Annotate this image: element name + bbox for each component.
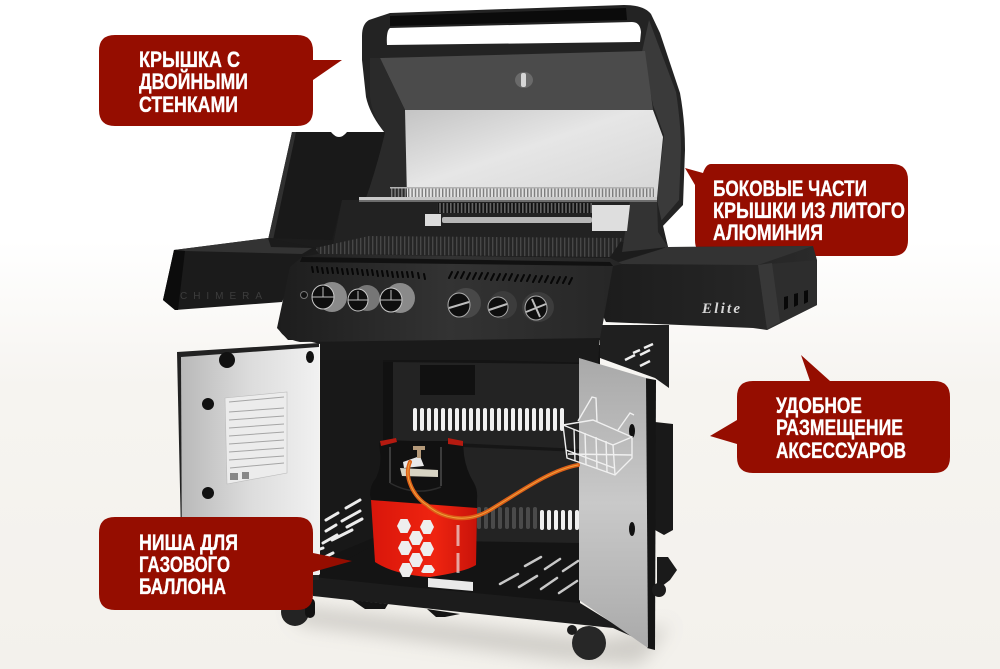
callout: cast aluminium lid sides: КРЫШКИ ИЗ ЛИТОГО [713,198,905,223]
cabinet bottom rail [313,577,640,640]
control knobs [312,282,554,322]
door specification label [225,392,287,484]
top cabinet rail [288,336,600,363]
callout: gas cylinder niche: БАЛЛОНА [139,574,226,599]
callout: gas cylinder niche: ГАЗОВОГО [139,552,230,577]
cabinet body [320,345,600,600]
callout: gas cylinder niche [99,517,352,610]
upper warming rack [390,187,654,197]
left wheel [281,598,315,626]
right cabinet door [579,358,677,650]
cabinet floor [313,540,580,604]
side burner lid [268,132,388,246]
gas tank [370,438,477,577]
right wheel [567,583,666,660]
callout: double-walled lid: СТЕНКАМИ [139,92,238,117]
white floor block [428,578,473,591]
lower warming rack [359,197,657,202]
callout: convenient accessory storage: РАЗМЕЩЕНИЕ [776,415,903,440]
left vent row [312,267,425,279]
left cabinet door [177,343,319,580]
heat reflector panel [405,110,663,198]
right cabinet side vents [600,325,669,388]
left wall slots [320,500,362,559]
cabinet feet [352,600,460,617]
floor shadow [290,605,670,665]
left side shelf [163,238,318,310]
right vent row [449,272,572,284]
grill body base fill [268,200,668,340]
callout: cast aluminium lid sides: АЛЮМИНИЯ [713,220,823,245]
upper back vent slots [413,408,567,431]
grill lid frame with handle [362,5,685,228]
callout: convenient accessory storage: УДОБНОЕ [776,393,862,418]
right side shelf [600,246,817,330]
callout: convenient accessory storage: АКСЕССУАРОВ [776,438,906,463]
floor slots [500,557,578,593]
ignition button [300,292,308,298]
callout: double-walled lid: КРЫШКА С [139,47,240,72]
rear infrared burner [425,203,630,231]
chimera engraving: CHIMERA [180,291,262,302]
temperature gauge [515,72,533,88]
front control panel [278,254,622,342]
callout: convenient accessory storage [710,355,950,473]
accessory wire basket [563,397,634,475]
callout: cast aluminium lid sides: БОКОВЫЕ ЧАСТИ [713,176,867,201]
callout: double-walled lid: ДВОЙНЫМИ [139,69,248,94]
callout: cast aluminium lid sides [685,164,908,256]
callout: double-walled lid [99,35,342,126]
firebox right flank [622,200,668,252]
elite logo: Elite [701,301,740,317]
right cabinet door handle [655,422,673,535]
lower back vent slots [477,507,580,531]
lid inner left side [366,58,407,198]
lid inner top panel [380,51,653,110]
cooking grate [315,236,623,257]
callout: gas cylinder niche: НИША ДЛЯ [139,530,238,555]
gas hose [408,462,578,518]
tank hexagon pattern [397,519,435,577]
gas grill illustration [163,5,817,660]
firebox back [332,200,668,250]
